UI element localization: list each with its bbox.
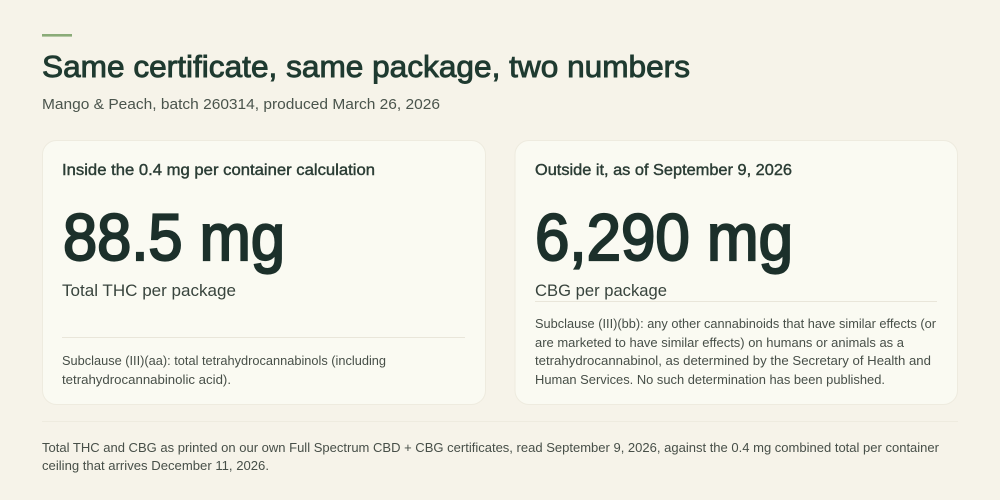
accent bar [42, 34, 72, 37]
subclause text: Human Services. No such determination has been published. [535, 372, 885, 387]
big number: THC: 88.5 mg [63, 200, 285, 274]
footnote: Total THC and CBG as printed on our own Full Spectrum CBD + CBG certificates, read September 9, 2026, against the 0.4 mg combined total per container [42, 440, 940, 455]
subclause text: Subclause (III)(bb): any other cannabinoids that have similar effects (or [535, 316, 937, 331]
big number: CBG: 6,290 mg [535, 200, 793, 274]
subtitle: Mango & Peach, batch 260314, produced March 26, 2026 [42, 96, 440, 113]
subclause text [62, 353, 386, 387]
subclause text: Subclause (III)(aa): total tetrahydrocannabinols (including [62, 353, 386, 368]
footnote: ceiling that arrives December 11, 2026. [42, 458, 269, 473]
subclause text: are marketed to have similar effects) on humans or animals as a [535, 335, 905, 350]
subclause text [535, 316, 937, 387]
subclause text: tetrahydrocannabinol, as determined by the Secretary of Health and [535, 353, 931, 368]
panel heading: Inside the 0.4 mg per container calculation [62, 162, 375, 179]
subclause text: tetrahydrocannabinolic acid). [62, 372, 231, 387]
metric label: Total THC per package [62, 281, 236, 300]
title: Same certificate, same package, two numbers [42, 49, 690, 84]
metric label: CBG per package [535, 281, 667, 300]
panel: inside the calculation [42, 140, 486, 404]
panel heading: Outside it, as of September 9, 2026 [535, 162, 792, 179]
footnote [42, 440, 940, 473]
panel: outside the calculation [515, 140, 958, 404]
